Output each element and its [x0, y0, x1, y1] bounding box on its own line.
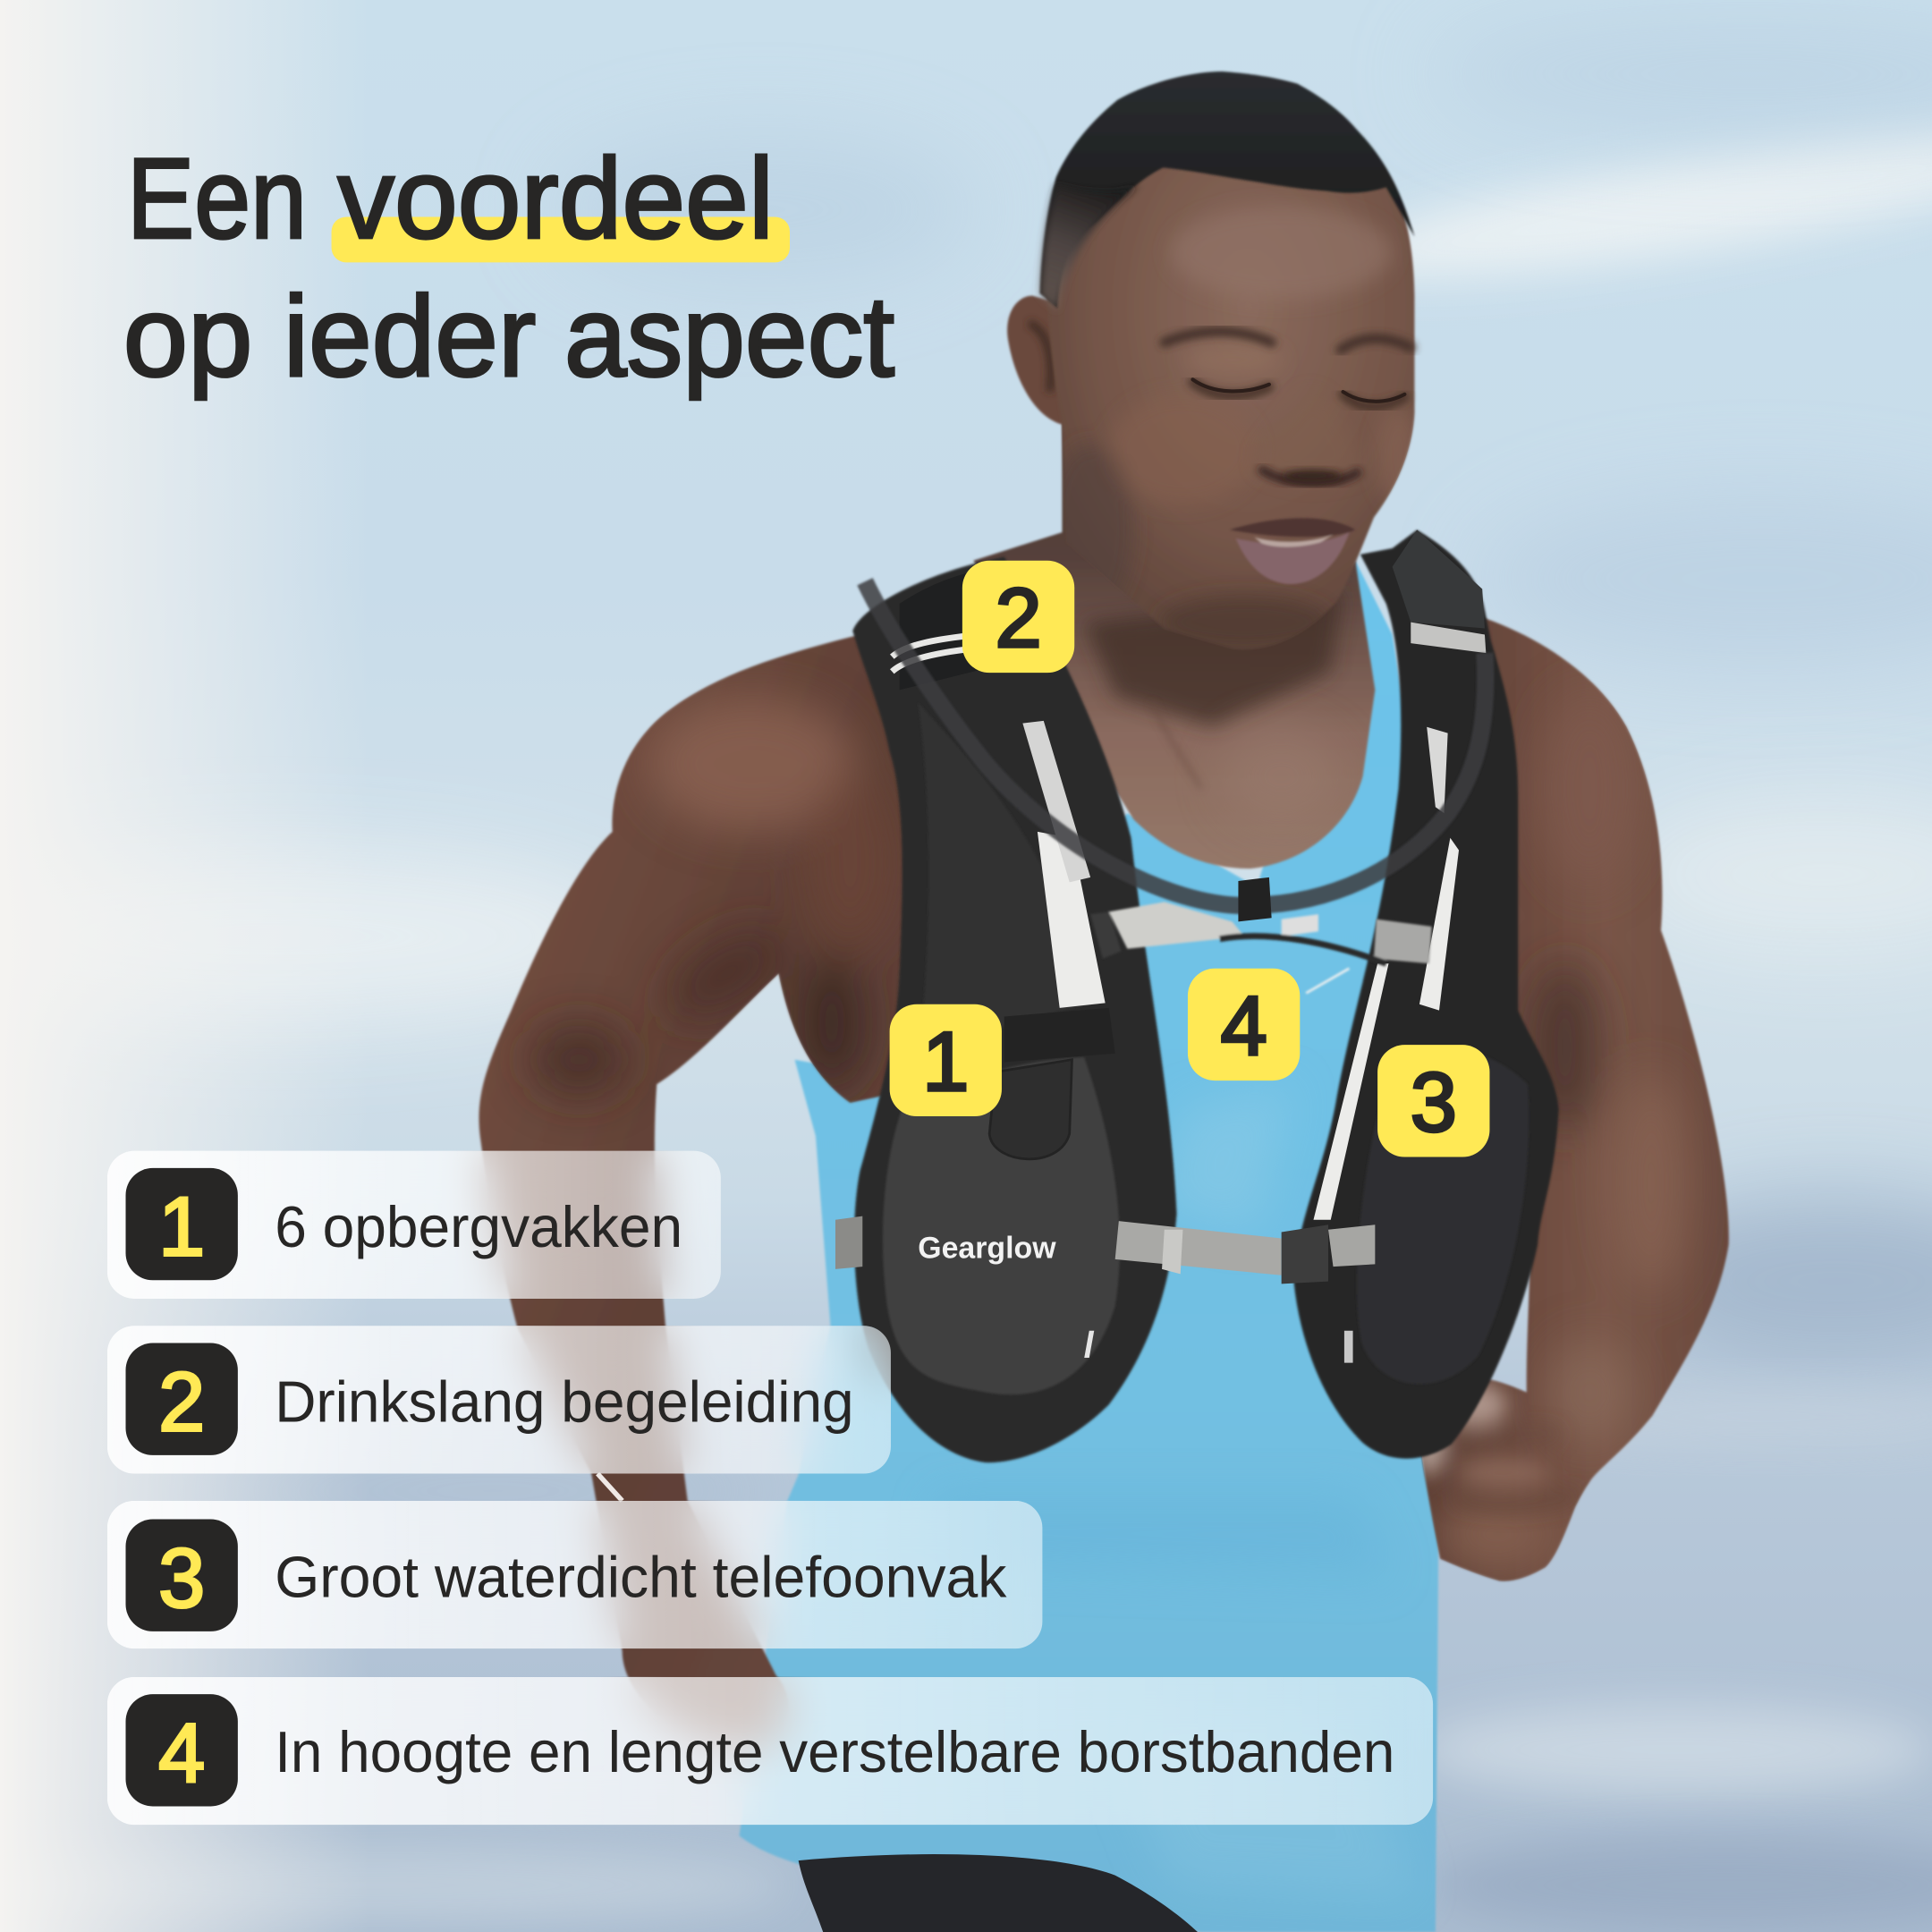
right arm and fist	[1414, 616, 1729, 1581]
eyebrows	[1165, 332, 1411, 350]
right pocket	[1357, 1046, 1529, 1385]
title: voordeel	[337, 135, 774, 263]
list item 3: Groot waterdicht telefoonvak	[275, 1544, 1007, 1609]
upper chest strap	[1090, 902, 1432, 993]
nose	[1257, 392, 1361, 483]
shorts	[799, 1854, 1198, 1932]
mesh at left shoulder	[900, 567, 1022, 690]
list item 1: 1	[158, 1180, 205, 1274]
lower chest strap	[835, 1216, 1375, 1363]
head	[1046, 166, 1417, 649]
marker 2: 2	[995, 571, 1042, 665]
list item 2: Drinkslang begeleiding	[275, 1369, 854, 1435]
white straps	[1022, 623, 1486, 1220]
marker 2	[962, 561, 1074, 673]
left pocket	[883, 1057, 1120, 1394]
mouth	[1230, 518, 1355, 584]
drink tube	[865, 581, 1486, 921]
ear	[1007, 296, 1074, 425]
list item 4: 4	[158, 1706, 205, 1800]
eyes	[1192, 379, 1404, 407]
title: Een	[127, 135, 307, 263]
vest brand: Gearglow	[918, 1231, 1056, 1265]
marker 3: 3	[1411, 1055, 1457, 1149]
title: op	[123, 273, 252, 401]
list item 2: 2	[158, 1354, 205, 1448]
chest and neck	[973, 419, 1375, 869]
marker 4	[1188, 969, 1300, 1080]
list item 2	[107, 1326, 891, 1474]
highlight under the word voordeel	[332, 216, 790, 262]
list item 3	[107, 1501, 1042, 1648]
left upper panel	[918, 702, 1090, 1060]
left arm	[479, 616, 936, 1750]
marker 1: 1	[922, 1014, 969, 1108]
left white shoulder trim	[892, 636, 967, 672]
list item 4: In hoogte en lengte verstelbare borstbanden	[275, 1719, 1394, 1784]
person	[479, 72, 1729, 1932]
vest left panel	[852, 557, 1177, 1462]
pocket flap	[1004, 1008, 1115, 1062]
list item 1	[107, 1151, 721, 1299]
marker 3	[1377, 1045, 1489, 1157]
tank top shading	[936, 1084, 1417, 1897]
list item 1: 6 opbergvakken	[275, 1194, 682, 1259]
title: ieder	[284, 273, 536, 401]
vest right panel	[1293, 530, 1559, 1459]
title: aspect	[564, 273, 894, 401]
marker 1	[890, 1004, 1002, 1116]
mesh at right shoulder	[1393, 530, 1485, 629]
tank top	[740, 561, 1515, 1932]
hair	[1040, 72, 1414, 310]
marker 4: 4	[1221, 979, 1267, 1072]
list item 3: 3	[158, 1530, 205, 1624]
list item 4	[107, 1677, 1433, 1825]
title	[123, 135, 894, 401]
